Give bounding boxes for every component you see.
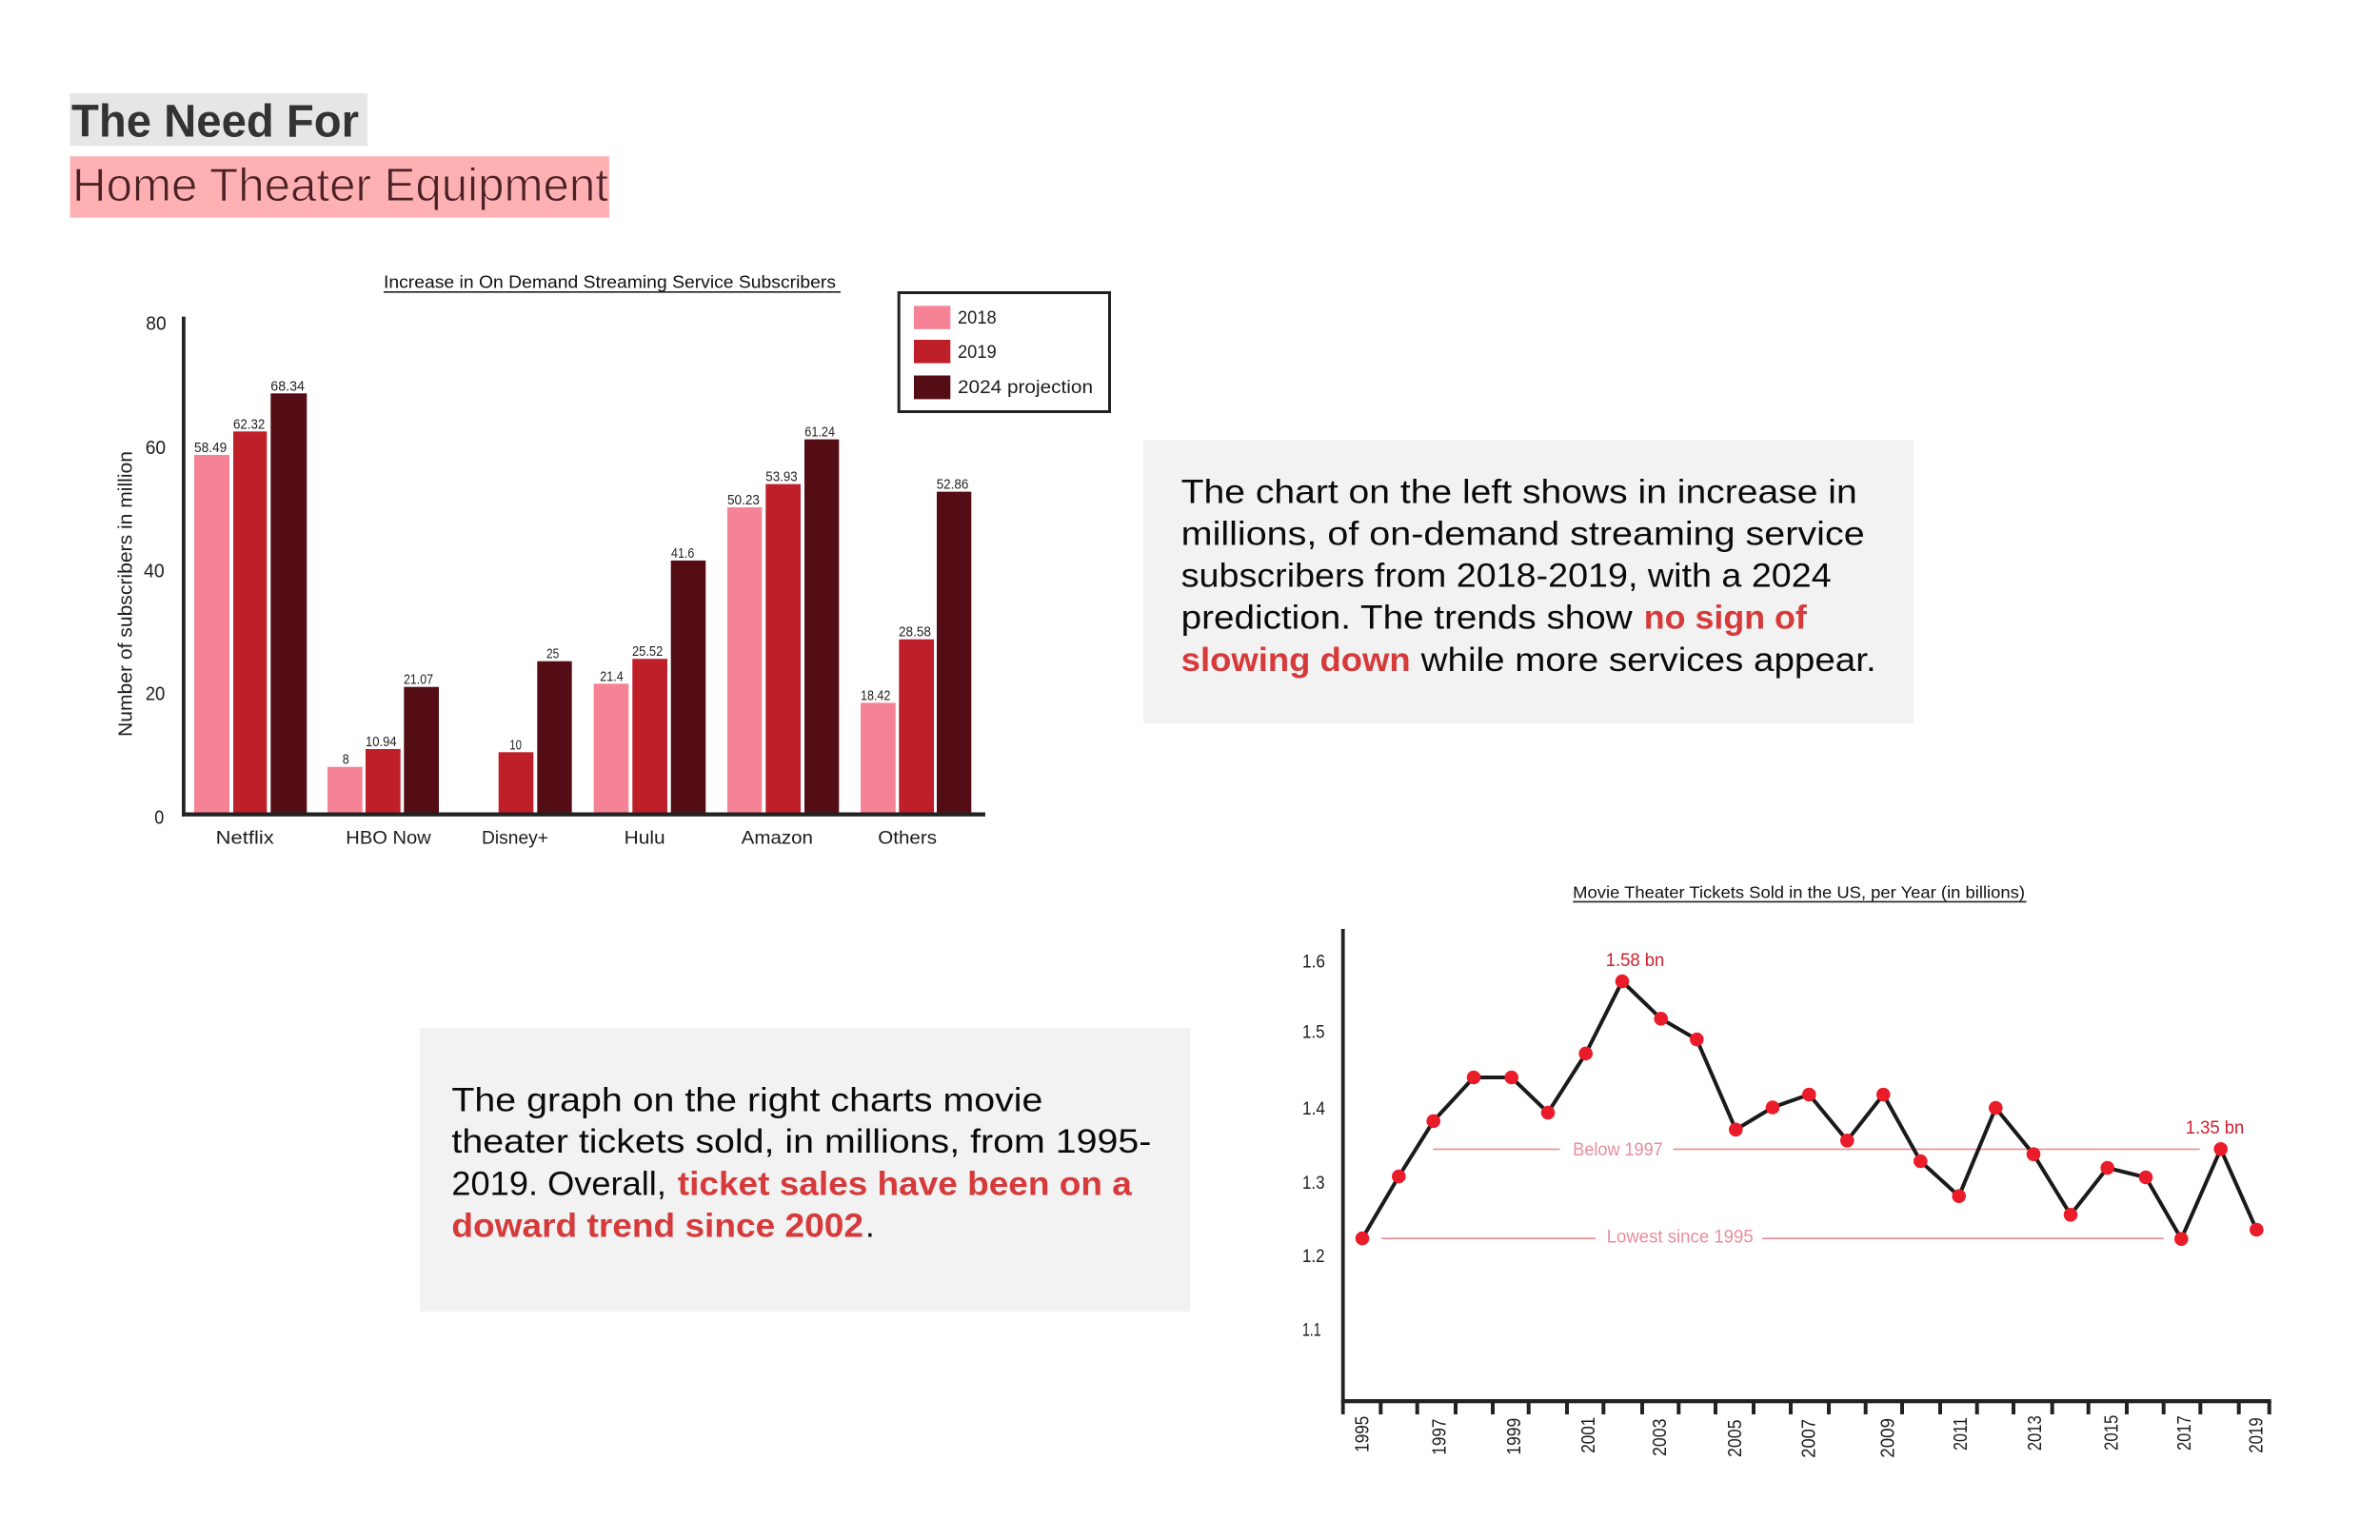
group: Hulu: 21.4 (600, 669, 624, 684)
category labels: Others (878, 828, 937, 849)
text panel: streaming commentary: millions, of on-demand streaming service (1181, 516, 1865, 553)
data points (1356, 975, 2264, 1246)
legend: 2024 projection (958, 377, 1093, 398)
group: Netflix: 68.34 (270, 379, 305, 394)
x axis year labels: 2019 (2247, 1417, 2268, 1453)
y axis labels: 40 (144, 562, 165, 582)
category labels: Hulu (625, 828, 665, 849)
category labels: Amazon (742, 828, 813, 849)
group: HBO Now: 8 (343, 753, 349, 768)
group: Disney+ (499, 647, 572, 813)
y axis labels (1302, 952, 1325, 1341)
group: Amazon: 61.24 (804, 425, 835, 441)
text panel: ticket sales commentary: theater tickets sold, in millions, from 1995- (451, 1123, 1151, 1160)
y axis labels: 60 (146, 438, 166, 459)
text panel: ticket sales commentary: ticket sales have been on a (678, 1166, 1132, 1203)
reference line: below 1997: Below 1997 (1573, 1140, 1663, 1160)
y axis labels (144, 314, 167, 828)
chart title: Movie Theater Tickets Sold in the US, per Year (in billions) (1573, 883, 2025, 902)
x axis year labels: 2015 (2101, 1415, 2122, 1451)
group: Others: 52.86 (937, 478, 968, 493)
text panel: ticket sales commentary: doward trend since 2002 (451, 1207, 863, 1244)
group: HBO Now (327, 673, 439, 813)
y axis labels: 80 (146, 314, 167, 335)
x axis year labels: 1995 (1353, 1416, 1374, 1452)
y axis title: Number of subscribers in million (115, 451, 136, 737)
callout: 1.35 bn: 1.35 bn (2186, 1118, 2244, 1138)
group: Others (861, 478, 971, 813)
group: Netflix (194, 379, 307, 813)
group: Amazon (727, 425, 839, 813)
y axis labels: 1.2 (1302, 1247, 1325, 1267)
category labels: Disney+ (482, 828, 548, 849)
callout: 1.58 bn: 1.58 bn (1606, 951, 1664, 971)
line chart: movie theater tickets (1302, 883, 2271, 1458)
y axis labels: 1.3 (1302, 1174, 1325, 1194)
legend (899, 293, 1110, 411)
title (70, 93, 609, 218)
y axis labels: 1.6 (1302, 952, 1325, 973)
group: Netflix: 62.32 (233, 417, 265, 432)
text panel: streaming commentary: slowing down (1181, 642, 1411, 679)
chart title: Increase in On Demand Streaming Service Subscribers (384, 273, 836, 292)
text panel: ticket sales commentary: The graph on the right charts movie (451, 1081, 1042, 1118)
x axis year labels: 1997 (1430, 1419, 1451, 1455)
text panel: ticket sales commentary: . (865, 1207, 875, 1244)
group: Disney+: 25 (546, 647, 559, 662)
x axis year labels: 2005 (1725, 1420, 1746, 1457)
bar chart: streaming subscribers (115, 273, 1109, 849)
x axis year labels: 2011 (1951, 1417, 1972, 1451)
text panel: streaming commentary (1143, 440, 1914, 723)
group: Disney+: 10 (509, 738, 522, 753)
text panel: streaming commentary: prediction. The trends show (1181, 600, 1633, 637)
category labels (216, 828, 937, 849)
text panel: ticket sales commentary: 2019. Overall, (451, 1166, 666, 1203)
x axis year labels: 2007 (1799, 1419, 1820, 1458)
chart axes (182, 317, 985, 817)
x axis year labels: 2003 (1650, 1418, 1671, 1456)
group: Amazon: 50.23 (727, 493, 760, 508)
text panel: streaming commentary: The chart on the left shows in increase in (1181, 473, 1857, 510)
category labels: Netflix (216, 828, 274, 849)
category labels: HBO Now (346, 828, 432, 849)
data line (1362, 981, 2256, 1239)
group: Others: 28.58 (899, 625, 931, 641)
y axis labels: 0 (154, 807, 164, 828)
group: Netflix: 58.49 (194, 441, 227, 456)
text panel: streaming commentary: no sign of (1644, 600, 1807, 637)
y axis labels: 1.1 (1302, 1321, 1321, 1341)
text panel: ticket sales commentary (420, 1028, 1190, 1312)
title line 1: The Need For (71, 96, 359, 147)
x axis year labels: 1999 (1504, 1418, 1525, 1455)
group: Hulu (594, 546, 705, 813)
chart axes and ticks (1341, 929, 2271, 1414)
x axis year labels (1353, 1415, 2268, 1458)
x axis year labels: 2001 (1578, 1417, 1599, 1453)
x axis year labels: 2013 (2025, 1415, 2046, 1451)
x axis year labels: 2009 (1877, 1418, 1898, 1458)
group: HBO Now: 10.94 (366, 735, 397, 750)
group: Others: 18.42 (861, 688, 890, 703)
y axis labels: 1.4 (1302, 1099, 1325, 1119)
legend: 2019 (958, 342, 997, 363)
group: Hulu: 41.6 (671, 546, 694, 562)
text panel: streaming commentary: subscribers from 2018-2019, with a 2024 (1181, 558, 1832, 595)
x axis year labels: 2017 (2174, 1415, 2195, 1451)
group: Hulu: 25.52 (632, 644, 663, 660)
legend: 2018 (958, 307, 997, 328)
y axis labels: 1.5 (1302, 1022, 1325, 1043)
title line 2: Home Theater Equipment (72, 160, 608, 211)
group: HBO Now: 21.07 (404, 673, 433, 688)
y axis labels: 20 (146, 684, 165, 705)
reference line: lowest since 1995: Lowest since 1995 (1607, 1228, 1754, 1248)
group: Amazon: 53.93 (765, 470, 798, 485)
text panel: streaming commentary: while more services appear. (1420, 642, 1876, 679)
